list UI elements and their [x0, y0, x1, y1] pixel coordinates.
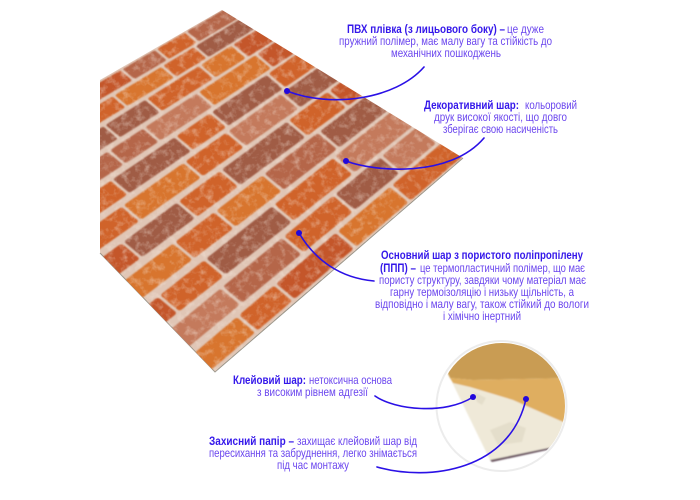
text: adhesive layer: нетоксична основа	[309, 373, 392, 387]
text: decorative layer: друк високої якості, що довго	[434, 110, 567, 124]
panel: brick wall sheet	[65, 8, 464, 373]
text: base layer: і хімічно інертний	[443, 309, 521, 323]
text: decorative layer: зберігає свою насиченість	[443, 122, 558, 136]
text: protective paper: захищає клейовий шар від	[297, 434, 417, 448]
callout arrow: PVC film	[284, 67, 424, 100]
callout arrow: base layer	[296, 230, 374, 281]
callout arrow: protective paper	[377, 396, 529, 473]
callout arrow: adhesive layer	[375, 394, 476, 409]
text: PVC film: це дуже	[507, 22, 544, 36]
text: adhesive layer	[233, 373, 392, 399]
text: decorative layer: Декоративний шар:	[424, 98, 519, 112]
text: PVC film	[339, 22, 552, 60]
text: base layer: відповідно і малу вагу, також стійкий до вологи	[375, 297, 589, 311]
text: PVC film: ПВХ плівка (з лицьового боку) –	[347, 22, 505, 36]
callout arrow: decorative layer	[343, 138, 484, 169]
text: PVC film: пружний полімер, має малу вагу та стійкість до	[339, 34, 552, 48]
text: base layer: це термопластичний полімер, що має	[420, 261, 585, 275]
text: protective paper: під час монтажу	[277, 458, 349, 472]
text: base layer: Основний шар з пористого поліпропілену	[381, 248, 583, 262]
text: PVC film: механічних пошкоджень	[391, 46, 501, 60]
text: decorative layer: кольоровий	[525, 98, 577, 112]
text: protective paper: Захисний папір –	[209, 434, 294, 448]
panel: close-up circle of adhesive layer	[436, 330, 570, 471]
text: base layer: гарну термоізоляцію і низьку щільність, а	[390, 285, 574, 299]
text: adhesive layer: з високим рівнем адгезії	[257, 385, 369, 399]
text: protective paper	[209, 434, 417, 472]
text: adhesive layer: Клейовий шар:	[233, 373, 306, 387]
text: decorative layer	[424, 98, 577, 136]
text: base layer: пористу структуру, завдяки чому матеріал має	[379, 273, 586, 287]
text: protective paper: пересихання та забруднення, легко знімається	[209, 446, 417, 460]
text: base layer	[375, 248, 589, 323]
text: base layer: (ППП) –	[380, 261, 416, 275]
